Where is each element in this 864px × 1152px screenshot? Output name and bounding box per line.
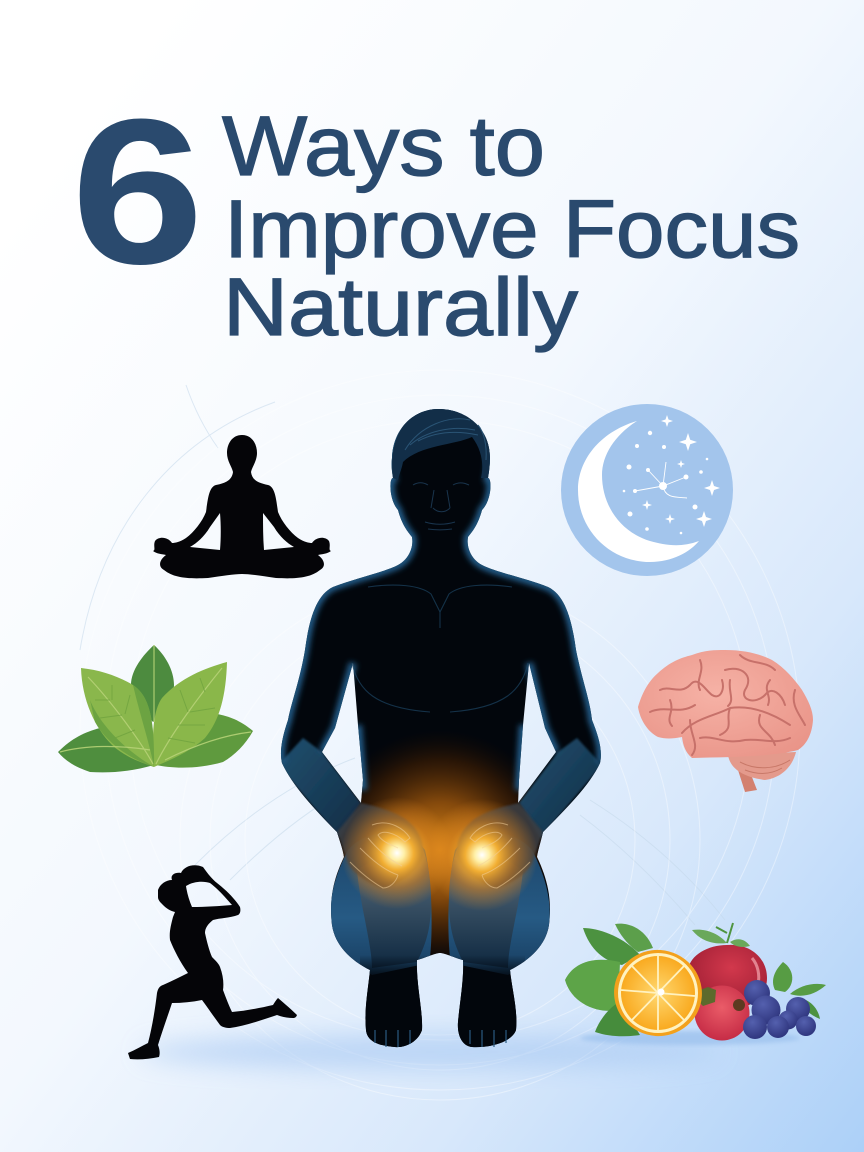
hair	[392, 409, 490, 480]
pomegranate	[694, 986, 750, 1040]
chest lines	[352, 585, 528, 712]
low left leaf	[58, 728, 154, 772]
thighs	[331, 847, 432, 975]
icon: brain	[638, 650, 813, 792]
stars	[623, 415, 720, 534]
title line 1: Ways to	[222, 99, 545, 193]
apple leaves	[692, 930, 750, 947]
shins	[360, 955, 525, 980]
concentric rings	[80, 370, 800, 1100]
icon: moon and stars	[561, 404, 733, 576]
leaf shading	[90, 685, 154, 767]
big left leaf	[81, 668, 154, 767]
apple	[688, 945, 767, 1010]
icon: green leaves	[58, 645, 253, 772]
floor shadow	[140, 1035, 720, 1069]
title line 2: Improve Focus	[224, 184, 800, 275]
blue rim light	[281, 409, 601, 790]
big right leaf	[153, 662, 227, 767]
brain stem	[738, 770, 757, 792]
forearms	[278, 738, 361, 838]
hand left	[337, 803, 423, 888]
icon: fruit and berries	[565, 923, 826, 1046]
low right leaf	[156, 714, 253, 768]
icon: lunging runner silhouette	[128, 865, 297, 1059]
berries	[743, 980, 816, 1039]
hair strands	[405, 419, 486, 460]
glowing knees	[341, 797, 538, 911]
big numeral 6: 6	[71, 76, 204, 307]
knees	[358, 850, 432, 968]
finger outlines	[350, 823, 530, 888]
back leaf	[131, 645, 174, 722]
toes	[375, 1030, 506, 1047]
constellation	[635, 462, 687, 498]
sprig leaves	[773, 962, 792, 992]
icon: meditation silhouette	[153, 435, 331, 578]
hand right	[457, 803, 543, 888]
fruit shadow	[580, 1031, 800, 1045]
face lines	[413, 483, 469, 530]
cerebellum	[728, 752, 796, 780]
cerebrum	[638, 650, 813, 758]
belly glow	[333, 740, 548, 958]
central human figure	[270, 400, 610, 1060]
brain folds	[650, 655, 805, 755]
title line 3: Naturally	[223, 262, 578, 353]
orange slice	[604, 940, 712, 1046]
body fill and shading	[270, 400, 610, 1060]
crescent	[578, 421, 699, 562]
fruit leaves	[583, 928, 640, 965]
leaf veins	[60, 645, 251, 764]
title	[71, 76, 800, 353]
